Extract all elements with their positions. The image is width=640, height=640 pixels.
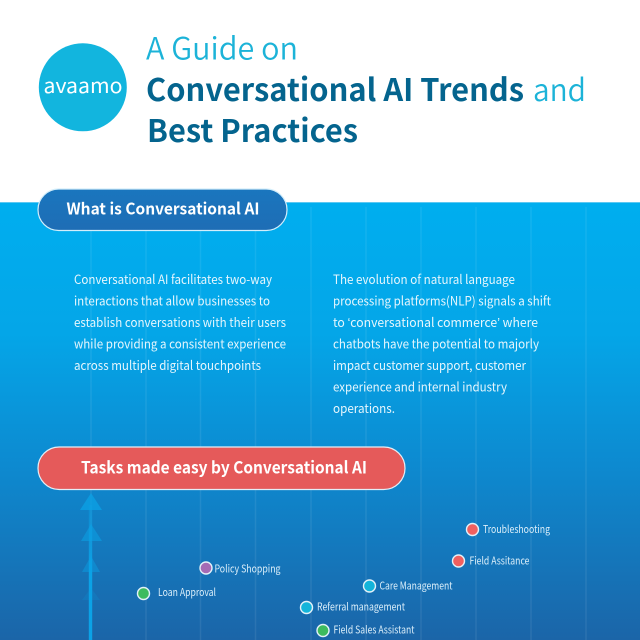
data point: Field Sales Assistant: Field Sales Assistant — [334, 622, 415, 638]
logo: avaamo circle — [39, 43, 127, 131]
text block: left column: establish conversations with their users — [74, 312, 286, 331]
text block: right column: chatbots have the potential to majorly — [333, 334, 539, 352]
heading: What is Conversational AI: What is Conversational AI — [66, 196, 260, 220]
data point: Care Management: Care Management — [380, 578, 453, 594]
arrow: upward growth axis — [80, 493, 102, 640]
data point: Referral management: Referral management — [317, 600, 405, 614]
heading: Tasks made easy by Conversational AI — [38, 447, 405, 490]
text block: right column: operations. — [333, 398, 395, 417]
text block: right column: experience and internal industry — [333, 376, 507, 396]
title: Best Practices — [147, 106, 358, 151]
title: and — [533, 65, 586, 110]
text block: left column — [74, 269, 286, 374]
heading: What is Conversational AI — [38, 189, 287, 230]
text block: left column: while providing a consistent experience — [74, 334, 286, 352]
text block: left column: interactions that allow businesses to — [74, 290, 270, 310]
data point: Policy Shopping: Policy Shopping — [214, 562, 281, 576]
text block: right column — [333, 269, 551, 417]
text block: right column: impact customer support, customer — [333, 355, 526, 374]
data point: Care Management — [364, 578, 453, 594]
data point: Loan Approval — [138, 585, 216, 600]
text block: left column: Conversational AI facilitates two-way — [74, 269, 272, 288]
data point: Troubleshooting — [466, 522, 550, 537]
data point: Field Assitance — [452, 554, 530, 568]
data point: Field Assitance: Field Assitance — [470, 554, 530, 568]
title: A Guide on — [146, 24, 298, 68]
text block: right column: The evolution of natural language — [333, 269, 515, 288]
text block: right column: processing platforms(NLP) signals a shift — [333, 290, 551, 310]
text block: right column: to ‘conversational commerce’ where — [333, 312, 538, 331]
data point: Loan Approval: Loan Approval — [158, 585, 216, 600]
heading: Tasks made easy by Conversational AI: Tasks made easy by Conversational AI — [81, 454, 367, 478]
title: Conversational AI Trends — [146, 65, 524, 110]
panel: blue gradient background — [0, 202, 640, 640]
data point: Troubleshooting: Troubleshooting — [483, 522, 550, 537]
logo: avaamo circle: avaamo — [44, 70, 122, 99]
title — [146, 24, 586, 151]
text block: left column: across multiple digital touchpoints — [74, 355, 261, 374]
